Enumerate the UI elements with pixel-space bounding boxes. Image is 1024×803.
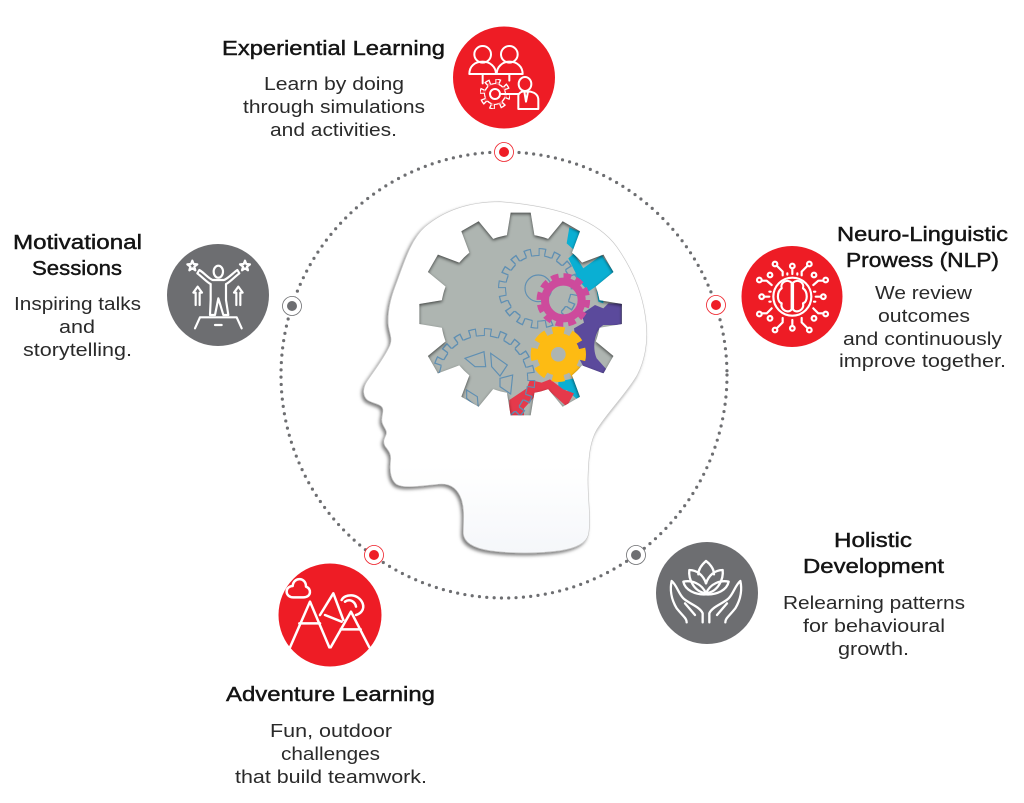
text: holistic development: growth. xyxy=(838,638,909,659)
ring marker: right xyxy=(706,296,726,314)
gear window inner shadow xyxy=(419,213,622,415)
ring marker: bottom left xyxy=(364,546,384,564)
dotted ring xyxy=(281,152,727,598)
ring marker: bottom right xyxy=(626,546,646,564)
text: motivational sessions: Sessions xyxy=(32,257,122,280)
icon: motivational sessions xyxy=(167,244,269,346)
text: experiential learning: Experiential Learning xyxy=(222,37,445,60)
text: experiential learning xyxy=(222,37,445,140)
text: motivational sessions xyxy=(13,231,142,360)
text: neuro-linguistic prowess: outcomes xyxy=(878,305,970,326)
text: adventure learning: challenges xyxy=(281,743,380,764)
text: motivational sessions: storytelling. xyxy=(23,339,132,360)
cyan gear pieces xyxy=(558,227,615,403)
text: neuro-linguistic prowess: improve together. xyxy=(839,350,1006,371)
text: motivational sessions: Inspiring talks xyxy=(14,293,141,314)
text: neuro-linguistic prowess: We review xyxy=(875,282,973,303)
icon: neuro-linguistic prowess xyxy=(742,246,842,347)
magenta gear xyxy=(539,276,587,324)
icon: holistic development xyxy=(656,542,758,644)
text: experiential learning: through simulations xyxy=(243,96,425,117)
text: motivational sessions: Motivational xyxy=(13,231,142,254)
icon: experiential learning xyxy=(453,26,555,128)
text: experiential learning: and activities. xyxy=(270,119,397,140)
text: holistic development: Holistic xyxy=(834,529,912,552)
text: holistic development: Development xyxy=(803,555,944,578)
head with gears xyxy=(364,202,647,553)
text: adventure learning: that build teamwork. xyxy=(235,766,427,787)
ring marker: left xyxy=(282,296,302,316)
text: holistic development: for behavioural xyxy=(803,615,945,636)
text: neuro-linguistic prowess xyxy=(837,223,1008,371)
blue line gear: lower xyxy=(435,332,532,428)
head silhouette xyxy=(364,202,647,553)
text: adventure learning xyxy=(226,683,435,787)
text: adventure learning: Adventure Learning xyxy=(226,683,435,706)
ring marker: top xyxy=(494,142,514,162)
text: neuro-linguistic prowess: Prowess (NLP) xyxy=(846,249,999,272)
text: neuro-linguistic prowess: Neuro-Linguistic xyxy=(837,223,1008,246)
text: experiential learning: Learn by doing xyxy=(264,73,404,94)
text: motivational sessions: and xyxy=(59,316,95,337)
icon: adventure learning xyxy=(278,564,382,666)
text: holistic development: Relearning patterns xyxy=(783,592,965,613)
blue line gear: upper xyxy=(502,252,575,325)
yellow gear xyxy=(534,330,582,378)
gear window xyxy=(417,210,623,428)
text: neuro-linguistic prowess: and continuously xyxy=(843,328,1003,349)
text: holistic development xyxy=(783,529,965,659)
red gear xyxy=(509,379,574,420)
purple gear xyxy=(574,303,622,373)
text: adventure learning: Fun, outdoor xyxy=(270,720,392,741)
